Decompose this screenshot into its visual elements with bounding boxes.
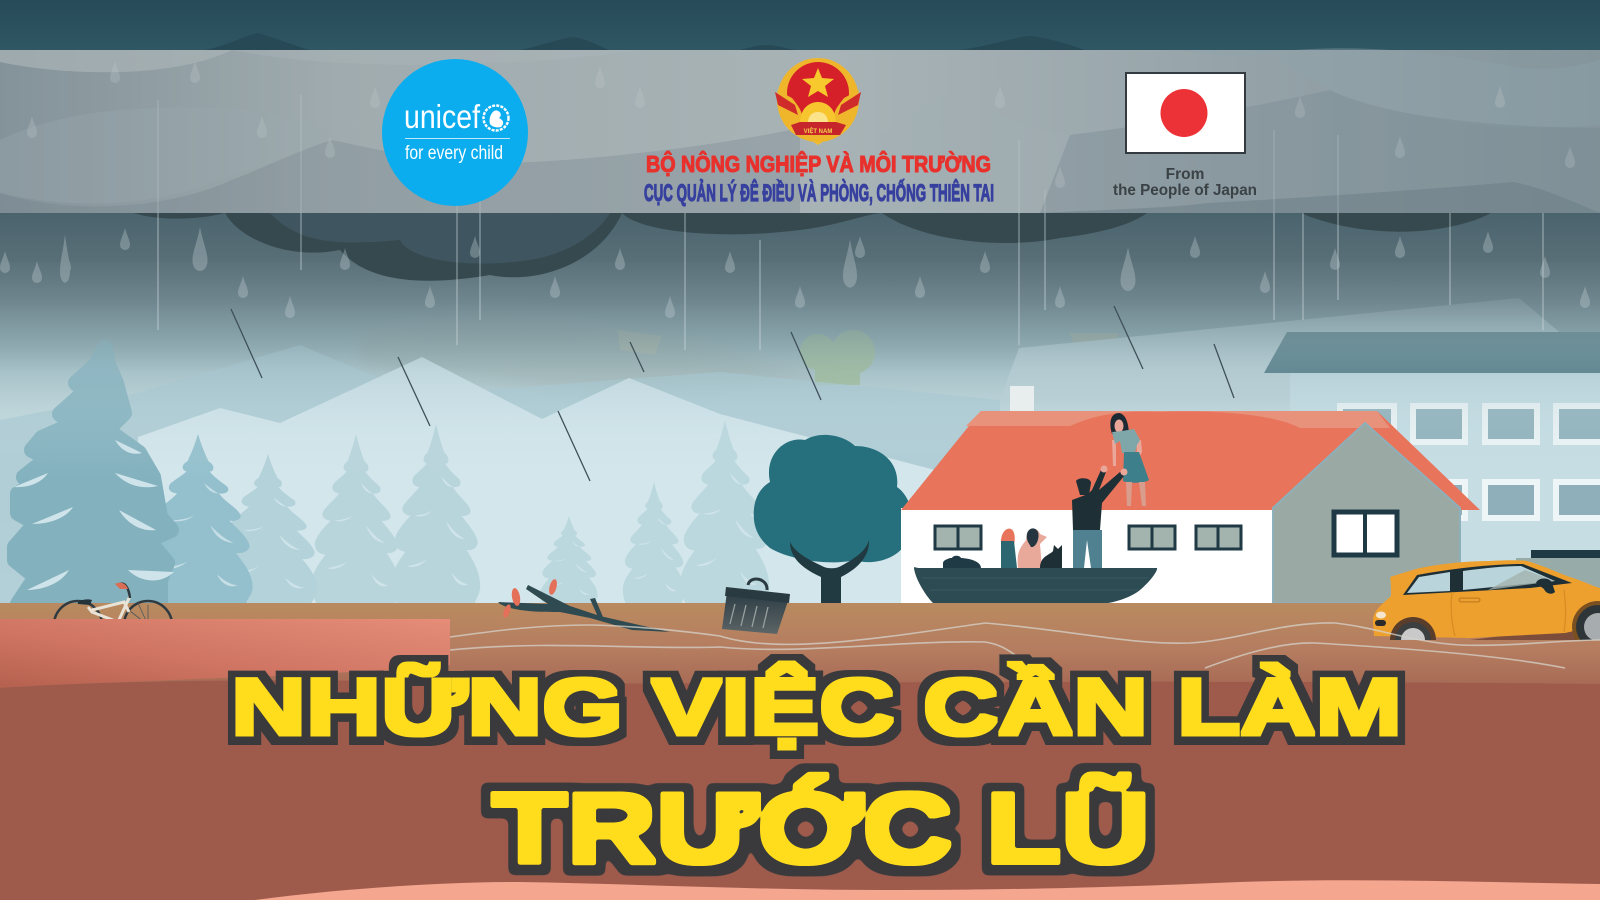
gear [800, 102, 836, 123]
emblem motto: VIỆT NAM [804, 127, 832, 135]
flag: Japan [1126, 73, 1245, 153]
background block behind car [1516, 550, 1600, 604]
house [901, 386, 1480, 603]
distant green tree [800, 330, 875, 385]
woman on roof [1110, 413, 1149, 506]
japan caption [1113, 166, 1257, 199]
car shadow [1470, 631, 1576, 640]
gable [1273, 423, 1460, 603]
headlight [1376, 612, 1386, 618]
car windows [1403, 564, 1572, 595]
logo: unicef [382, 59, 528, 206]
emblem: Vietnam national emblem [775, 58, 861, 145]
top band [0, 0, 1600, 50]
front mountains [138, 357, 935, 604]
building [1000, 298, 1600, 604]
title band [0, 680, 1600, 900]
storm clouds [112, 200, 1504, 281]
globe emblem [484, 106, 508, 130]
ground [0, 603, 1600, 687]
department name: CỤC QUẢN LÝ ĐÊ ĐIỀU VÀ PHÒNG, CHỐNG THIÊN TAI [644, 178, 994, 207]
wheat sides [777, 90, 859, 127]
header clouds [0, 50, 232, 72]
star [802, 68, 834, 97]
sky background [0, 0, 1600, 604]
unicef wordmark: unicef [404, 98, 481, 135]
fir trees [14, 348, 769, 604]
car wheels [1390, 617, 1436, 640]
japan caption: From [1166, 166, 1204, 183]
door seams and handle [1451, 590, 1566, 636]
raindrops [0, 227, 1590, 318]
tree trunk [790, 540, 869, 604]
title line 1: NHỮNG VIỆC CẦN LÀM [231, 662, 1402, 751]
tree [754, 435, 912, 604]
fallen branch [498, 578, 670, 632]
tree crown [754, 435, 912, 562]
unicef tagline: for every child [405, 143, 503, 164]
wall [901, 508, 1273, 603]
header panel [0, 48, 1600, 213]
bicycle [54, 583, 172, 649]
big fir [14, 348, 174, 604]
mirror [1536, 578, 1555, 594]
flood water lines [450, 623, 1600, 668]
header drops [27, 61, 1575, 188]
haze silhouettes [360, 305, 1119, 395]
salmon platform [0, 619, 450, 688]
fog overlay [0, 262, 1600, 480]
car [1372, 560, 1600, 640]
car body [1373, 560, 1600, 638]
child, dog and cat [1001, 528, 1062, 568]
bottom salmon wave [255, 880, 1600, 900]
back mountains [0, 345, 1000, 604]
ministry name: BỘ NÔNG NGHIỆP VÀ MÔI TRƯỜNG [646, 150, 991, 177]
wall windows [935, 526, 1241, 549]
header vertical rain [158, 95, 1338, 213]
gable window [1334, 512, 1397, 555]
man reaching up [1072, 466, 1128, 568]
diagonal rain streaks [231, 306, 1234, 481]
trash can [722, 579, 790, 634]
boat [914, 556, 1157, 603]
distant chimney [1070, 333, 1119, 363]
title line 2: TRƯỚC LŨ [492, 773, 1150, 883]
chimney [1010, 386, 1034, 412]
roof [901, 411, 1480, 510]
japan caption: the People of Japan [1113, 182, 1257, 199]
distant tan box [618, 330, 662, 355]
vertical rain [158, 95, 1543, 350]
